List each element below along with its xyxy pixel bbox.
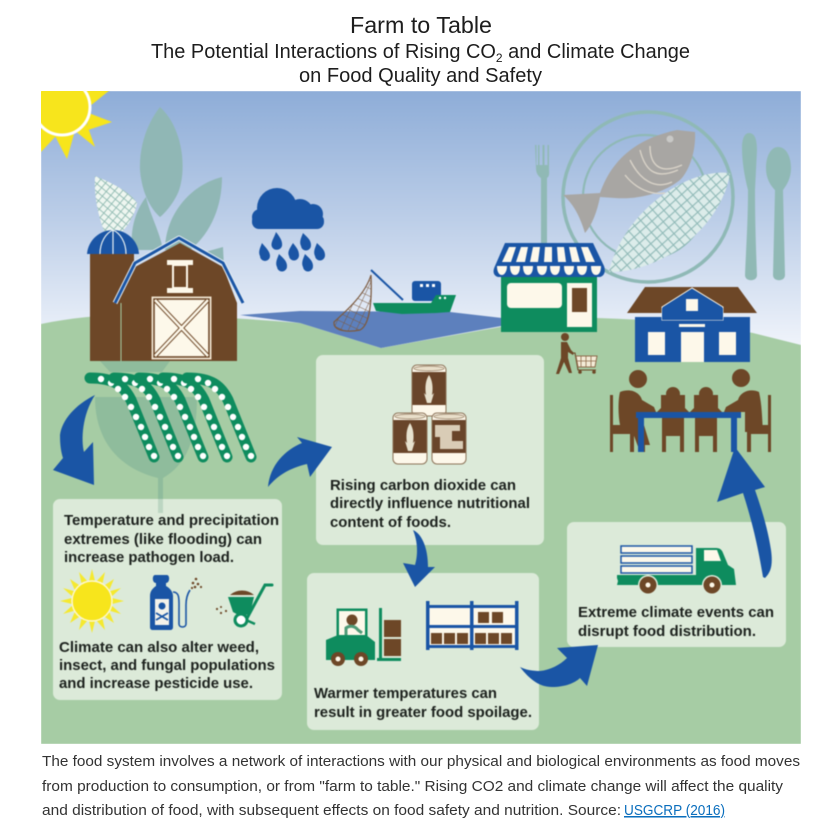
ground — [41, 315, 801, 744]
caption: The food system involves a network of interactions with our physical and biological environments as food moves — [42, 753, 800, 770]
shopper with cart — [556, 333, 597, 374]
subtitle: 2 — [496, 51, 503, 65]
caption: and distribution of food, with subsequent effects on food safety and nutrition. Source: — [42, 802, 621, 819]
arrow: to distribution panel — [520, 645, 598, 687]
text: spoilage — [314, 685, 532, 721]
sky background — [41, 91, 801, 346]
icon: wheelbarrow — [216, 585, 272, 626]
body text: pesticide: insect, and fungal populations — [59, 657, 275, 674]
fish — [563, 130, 695, 233]
corn cob — [95, 176, 137, 231]
fishing boat — [371, 270, 456, 314]
subtitle — [151, 41, 690, 87]
icon: forklift — [326, 608, 401, 666]
silo — [87, 230, 139, 361]
subtitle: The Potential Interactions of Rising CO — [151, 41, 497, 63]
icon: sun — [60, 569, 124, 633]
arrow: to nutrition panel — [268, 437, 332, 487]
house — [627, 287, 757, 362]
plant silhouette leaves — [132, 107, 224, 267]
arrow: to table — [717, 447, 772, 578]
arrow: field to panel — [53, 395, 95, 485]
text: distribution: disrupt food distribution. — [578, 623, 756, 640]
barn — [115, 238, 243, 361]
sun: sky — [41, 91, 112, 160]
text: nutrition: directly influence nutritional — [330, 495, 530, 512]
text: spoilage: Warmer temperatures can — [314, 685, 497, 702]
knife — [742, 133, 757, 280]
heading text: pathogens — [64, 512, 279, 566]
panel: spoilage — [307, 573, 539, 730]
text: nutrition: Rising carbon dioxide can — [330, 477, 516, 494]
caption: from production to consumption, or from "farm to table." Rising CO2 and climate change will affect the quality — [42, 778, 783, 795]
text: nutrition: content of foods. — [330, 514, 451, 531]
text: distribution: Extreme climate events can — [578, 604, 774, 621]
subtitle: on Food Quality and Safety — [299, 65, 542, 87]
market store — [494, 243, 605, 332]
heading text: pathogens: increase pathogen load. — [64, 549, 234, 566]
fishing net — [334, 275, 371, 331]
subtitle: and Climate Change — [503, 41, 690, 63]
crop field rows — [90, 376, 254, 459]
dining table — [636, 412, 741, 452]
spoon — [766, 147, 791, 280]
icon: warehouse shelves — [426, 601, 518, 650]
corn on plate — [609, 173, 730, 272]
plate — [563, 112, 733, 282]
source link: USGCRP (2016) — [624, 802, 725, 819]
family at dining table — [610, 369, 771, 452]
body text: pesticide: and increase pesticide use. — [59, 675, 253, 692]
icon: pesticide sprayer — [150, 575, 202, 630]
icon: stacked cans — [393, 365, 466, 464]
panel: pathogens — [53, 499, 282, 700]
rain cloud — [252, 188, 325, 272]
caption — [42, 753, 800, 819]
body text: pesticide: Climate can also alter weed, — [59, 639, 259, 656]
icon: delivery truck — [617, 546, 736, 595]
water — [240, 311, 502, 348]
illustration panel — [34, 79, 801, 744]
text: distribution — [578, 604, 774, 640]
fork — [535, 145, 549, 243]
arrow: to spoilage panel — [403, 530, 435, 587]
heading text: pathogens: extremes (like flooding) can — [64, 531, 262, 548]
title: Farm to Table — [350, 12, 492, 38]
plant silhouette lower bowl — [95, 361, 197, 510]
text: spoilage: result in greater food spoilage. — [314, 704, 532, 721]
text: nutrition — [330, 477, 530, 531]
heading text: pathogens: Temperature and precipitation — [64, 512, 279, 529]
body text: pesticide — [59, 639, 275, 692]
panel: distribution — [567, 522, 786, 647]
stem overlay — [158, 499, 163, 513]
panel: nutrition — [316, 355, 544, 545]
